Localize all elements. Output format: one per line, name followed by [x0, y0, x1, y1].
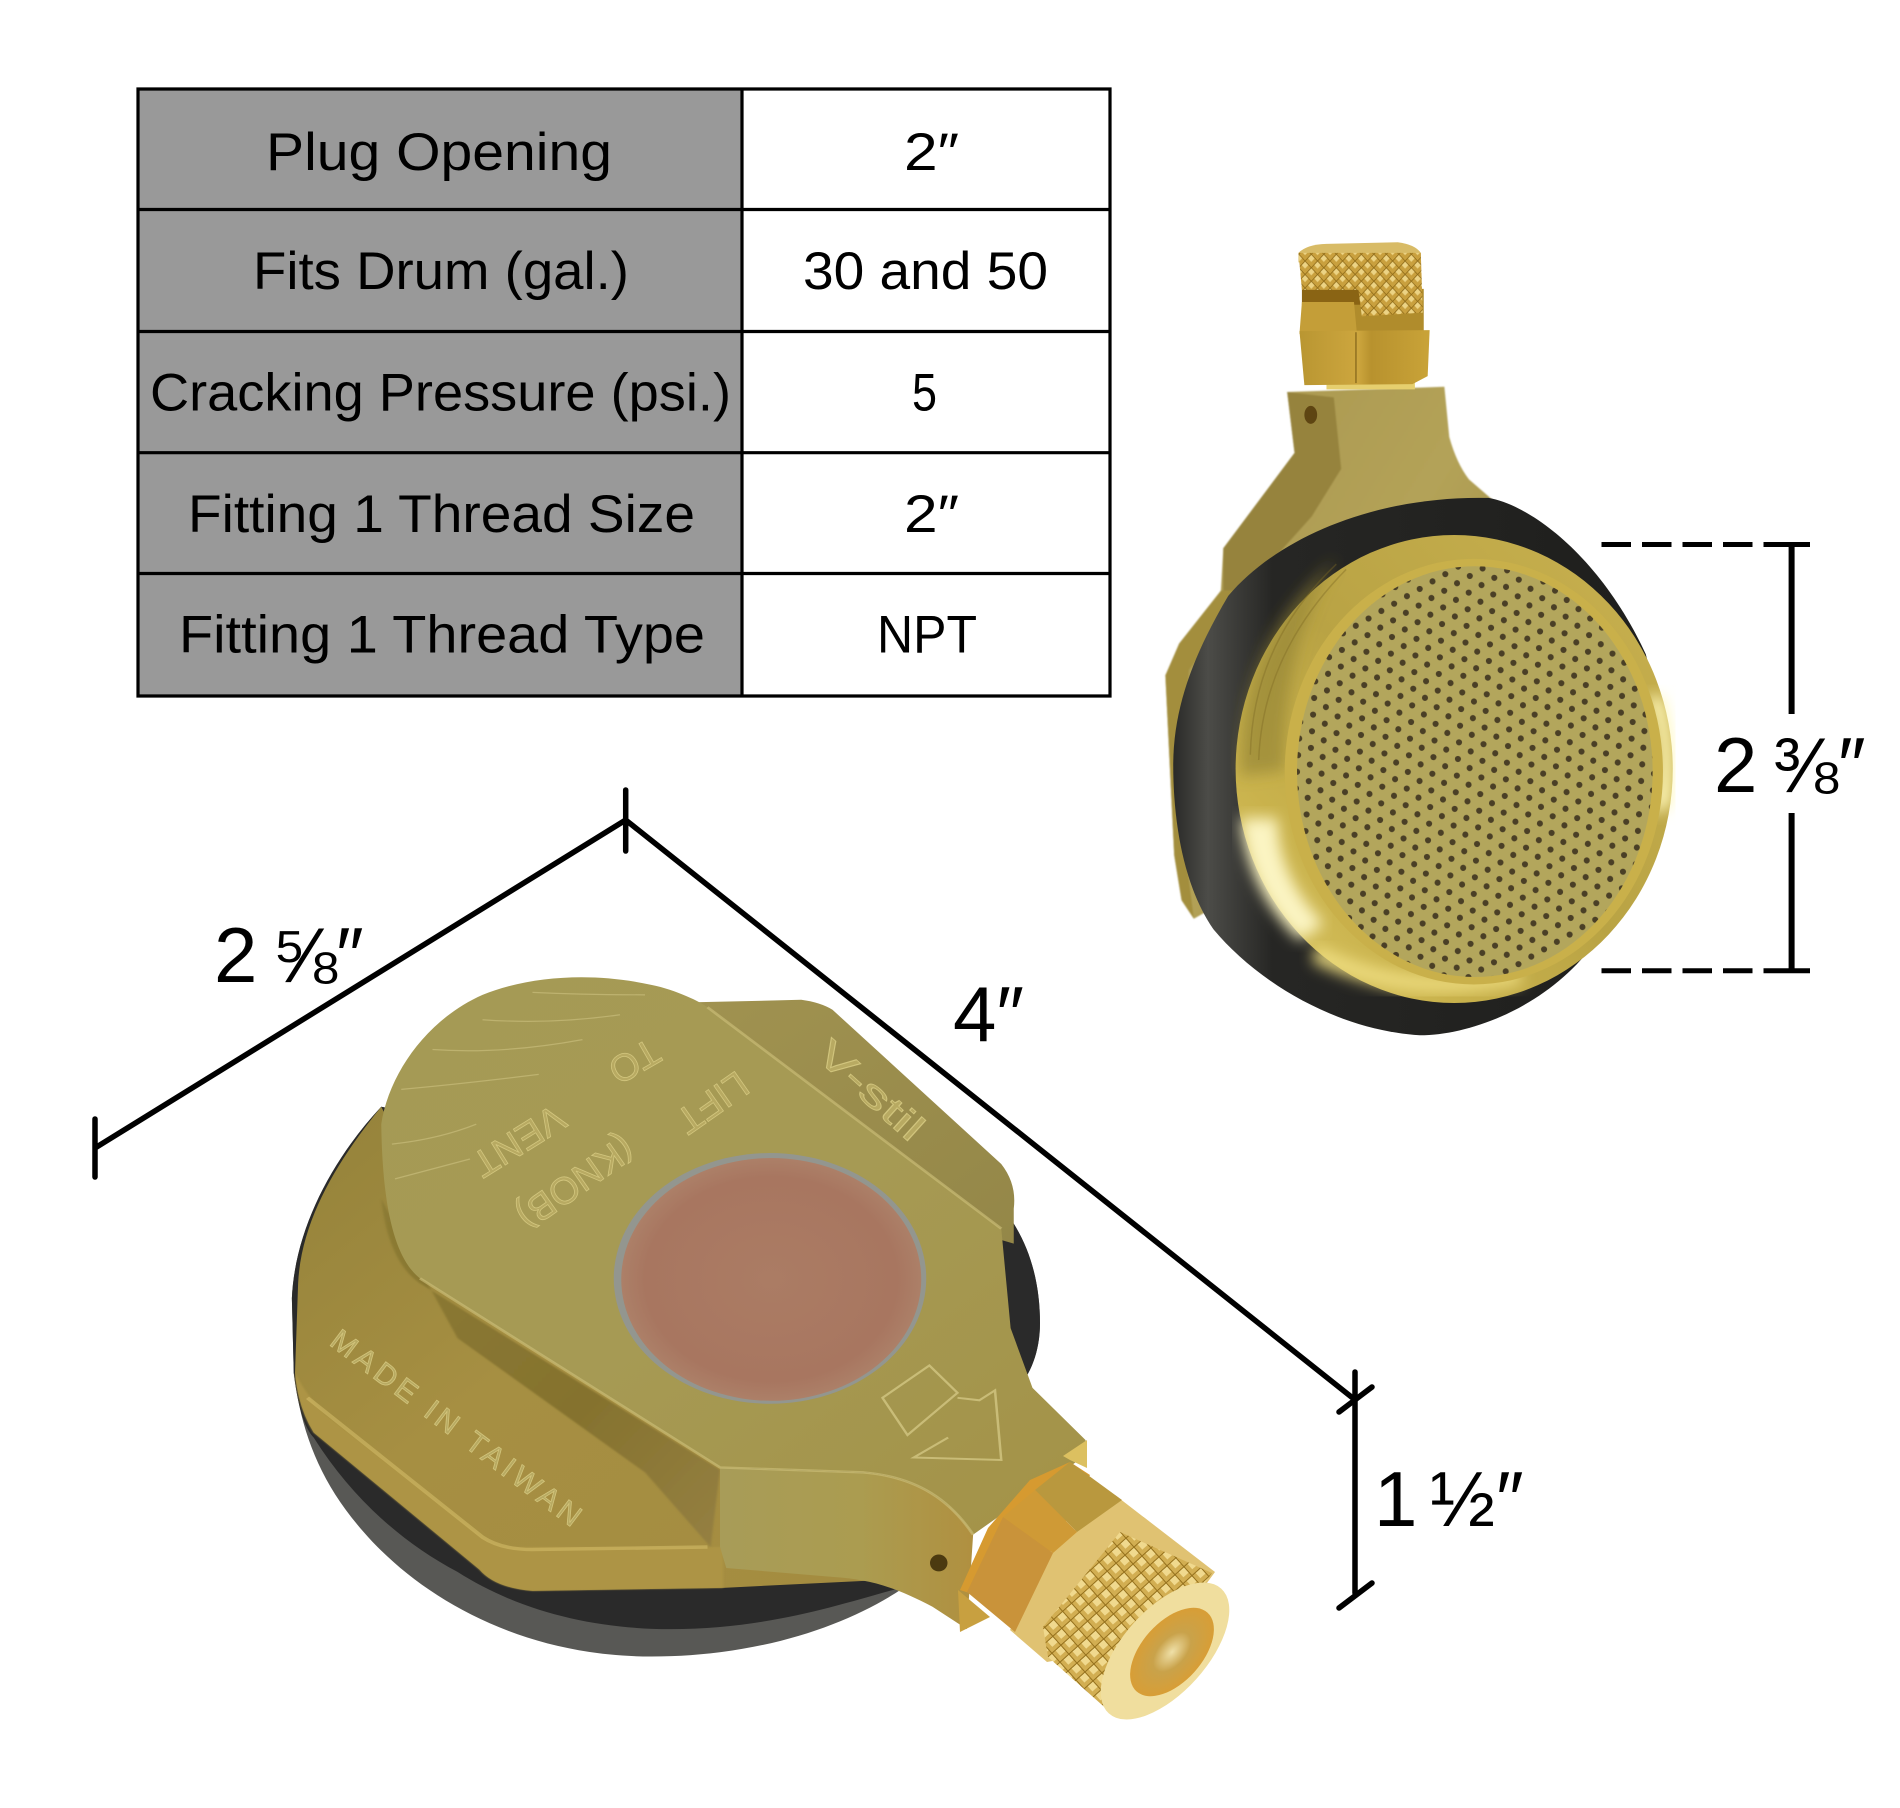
embossed lettering: KNOB: (KNOB): [508, 1126, 641, 1237]
embossed arrow mark: [882, 1365, 1001, 1460]
label 2 3/8: ″: [1838, 721, 1866, 809]
label 2 5/8: ⅝: [272, 911, 338, 999]
row: fits drum: Fits Drum (gal.): [253, 242, 629, 301]
row: thread type: Fitting 1 Thread Type: [179, 606, 705, 665]
cap bore: [1114, 1593, 1230, 1711]
knob cap: [1298, 242, 1421, 262]
table grid: [138, 89, 1110, 696]
inner rim: [1285, 559, 1663, 984]
hex lower facet: [967, 1517, 1053, 1632]
table label column: [138, 89, 742, 696]
shadow wall of raised face: [381, 1199, 720, 1547]
row: plug opening: Plug Opening: [266, 123, 612, 182]
label 2 5/8: ″: [336, 911, 364, 999]
row: fits drum: 30 and 50: [803, 242, 1048, 301]
label 1 1/2: ½: [1430, 1455, 1495, 1543]
raised body back facet: [695, 1000, 1014, 1244]
gold gap: [960, 1462, 1090, 1610]
cap end face: [1078, 1560, 1252, 1742]
label 1 1/2: ″: [1496, 1455, 1524, 1543]
collar: [1010, 1495, 1215, 1662]
row: plug opening: 2″: [904, 123, 959, 182]
knurled knob: [1298, 253, 1423, 316]
label 2 5/8: 2: [214, 911, 257, 999]
row: thread size: Fitting 1 Thread Size: [188, 485, 695, 544]
hex fitting: [1299, 302, 1430, 385]
row: thread type: [179, 606, 977, 665]
embossed lettering: V-stil: V-stil: [808, 1032, 932, 1150]
neck pin hole: [930, 1555, 948, 1571]
embossed lettering: VENT: VENT: [464, 1096, 572, 1185]
rim specular line: [308, 1398, 708, 1550]
neck tip: [958, 1590, 990, 1632]
knob notch: [1302, 286, 1361, 305]
knurled cap: [1043, 1532, 1212, 1712]
hex mid facet: [1003, 1490, 1077, 1553]
dimension: 2 3/8 inch: [1602, 544, 1866, 971]
row: thread type: NPT: [877, 606, 977, 665]
label 2 3/8: ⅜: [1773, 721, 1839, 809]
photo: valve mesh side view: [1165, 242, 1673, 1035]
top brushed face: [381, 977, 1086, 1535]
ring highlights: [1241, 696, 1673, 992]
collar: [1326, 381, 1415, 389]
row: thread size: [188, 485, 959, 544]
photo: valve top view: [292, 977, 1086, 1656]
rubber gasket: [1173, 498, 1670, 1035]
dimension: 2 5/8 inch: [95, 790, 626, 1177]
hex top facet: [1035, 1462, 1122, 1532]
label 1 1/2: 1: [1374, 1455, 1417, 1543]
label 4: 4″: [953, 970, 1024, 1058]
lower plate: [295, 1107, 895, 1591]
brushed scratch marks: [392, 992, 645, 1179]
row: plug opening: [266, 123, 959, 182]
neck wall: [720, 1467, 973, 1629]
label 2 5/8: [214, 911, 364, 999]
body ridge highlights: [420, 1007, 1001, 1535]
row: fits drum: [253, 242, 1048, 301]
photo: brass fitting and knurled cap: [958, 1440, 1252, 1742]
dimension: 4 inch: [626, 820, 1372, 1412]
band under knob: [1350, 289, 1424, 334]
perforated mesh: [1297, 566, 1653, 977]
label 2 3/8: [1714, 721, 1866, 809]
rubber gasket dark band: [292, 1107, 1040, 1629]
embossed lettering: LIFT: LIFT: [668, 1062, 756, 1141]
body corner: [1063, 1440, 1087, 1468]
valve body: [1165, 387, 1493, 919]
row: thread size: 2″: [904, 485, 959, 544]
ring left shading: [1240, 559, 1336, 776]
thread grooves: [1250, 564, 1346, 760]
rubber gasket outer rim: [292, 1107, 1040, 1656]
lower plate rim: [295, 1373, 723, 1591]
embossed lettering: TO: TO: [601, 1029, 667, 1092]
row: cracking pressure: Cracking Pressure (psi.): [150, 364, 731, 423]
threaded brass ring: [1236, 535, 1673, 1003]
body pin hole: [1304, 406, 1317, 424]
embossed lettering: made in taiwan: MADE IN TAIWAN: [324, 1323, 587, 1533]
row: cracking pressure: 5: [912, 364, 937, 423]
label 1 1/2: [1374, 1455, 1524, 1543]
copper disc: [614, 1153, 926, 1404]
label 2 3/8: 2: [1714, 721, 1757, 809]
dimension: 1 1/2 inch: [1339, 1372, 1524, 1608]
spec table: [138, 89, 1110, 696]
